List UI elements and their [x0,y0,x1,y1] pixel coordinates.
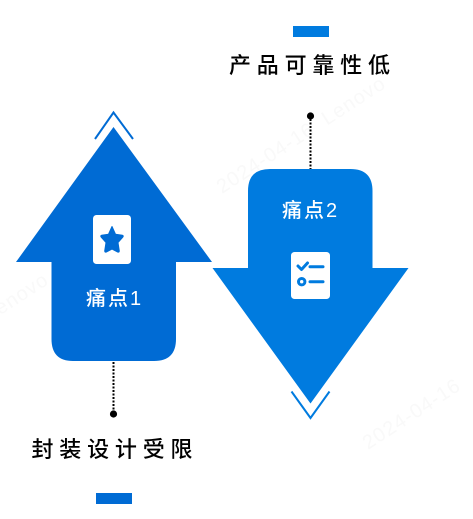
connector: pain point 1 [110,362,117,418]
top accent bar [293,26,329,37]
arrow 1: up arrow panel [16,112,212,361]
chevron below arrow 2 [292,392,330,418]
bottom accent bar [96,493,132,504]
watermarks: 2024-04-16 Lenovo [213,72,390,198]
arrow 2 shape [212,169,408,404]
arrow 1 shape [16,127,212,361]
chevron above arrow 1 [95,112,133,139]
connector: pain point 2 [307,112,314,169]
arrow 2: down arrow panel [212,169,408,418]
watermarks: 2024-04-16 [359,375,465,454]
icon: star card [93,215,131,264]
label: 痛点1: 痛点1 [86,287,143,310]
heading: 产品可靠性低: 产品可靠性低 [229,53,396,78]
icon: checklist card [291,252,330,299]
watermarks [0,72,465,454]
heading: 封装设计受限: 封装设计受限 [32,437,198,462]
label: 痛点2: 痛点2 [282,199,339,222]
